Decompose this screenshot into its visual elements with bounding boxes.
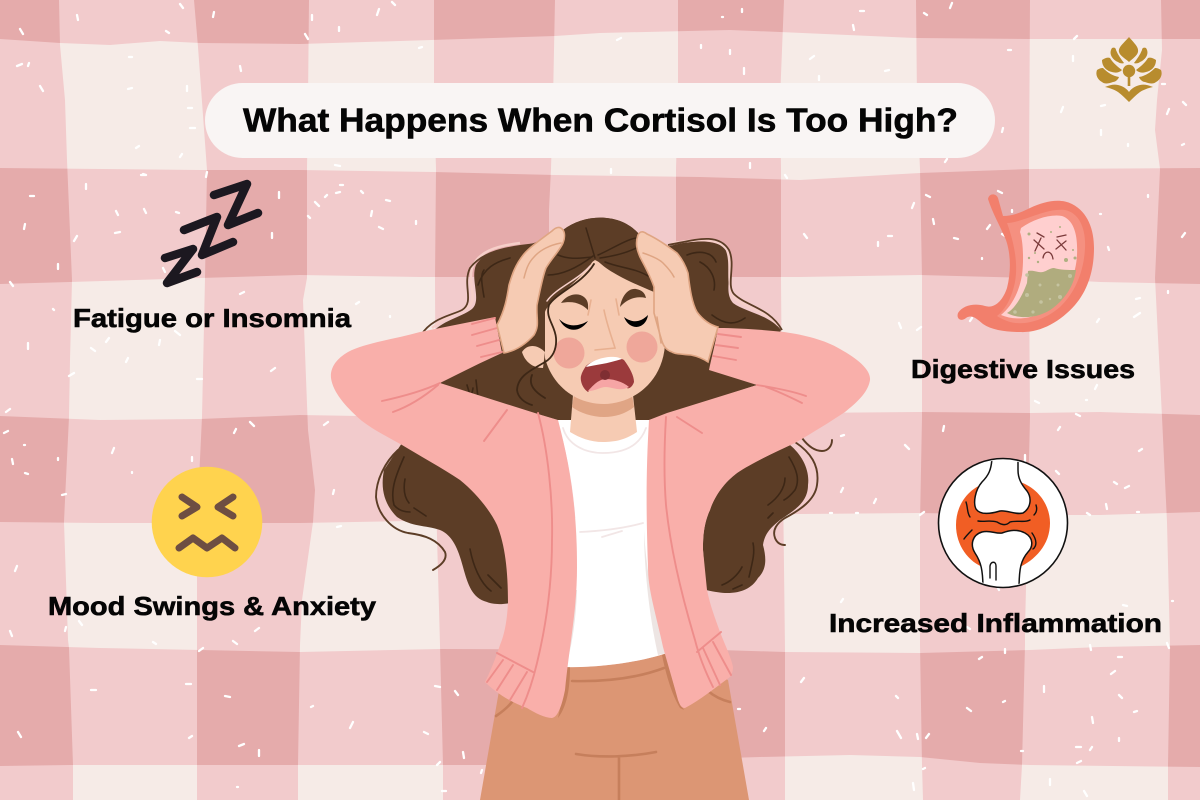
eyes bbox=[559, 315, 648, 330]
icon: stomach bbox=[958, 194, 1094, 332]
character: stressed woman bbox=[331, 218, 870, 800]
label: Digestive Issues: Digestive Issues bbox=[911, 354, 1135, 384]
hair: lower right bbox=[703, 438, 832, 593]
hair: fringe and loose strand bbox=[517, 218, 654, 405]
icon: inflamed joint bbox=[938, 450, 1068, 590]
trousers bbox=[480, 653, 749, 800]
ear bbox=[522, 346, 545, 368]
hair: lower left bbox=[376, 443, 510, 604]
white shirt bbox=[557, 420, 667, 667]
face bbox=[522, 260, 665, 404]
title pill bbox=[205, 83, 995, 158]
eyebrows bbox=[561, 289, 646, 310]
hair: upper back bbox=[421, 218, 782, 425]
neck bbox=[570, 395, 637, 442]
right hand bbox=[637, 232, 718, 362]
jacket: right sleeve and panel bbox=[647, 328, 870, 708]
label: Increased Inflammation: Increased Inflammation bbox=[829, 608, 1162, 638]
logo: gold lotus bbox=[1096, 37, 1162, 102]
title text: What Happens When Cortisol Is Too High? bbox=[243, 102, 958, 138]
left hand bbox=[497, 227, 564, 353]
icon: zzz sleep bbox=[165, 184, 258, 283]
jacket: left sleeve and panel bbox=[331, 317, 577, 718]
icon: distressed emoji bbox=[152, 467, 262, 577]
mouth bbox=[581, 358, 634, 392]
cheeks bbox=[554, 332, 658, 368]
label: Mood Swings & Anxiety: Mood Swings & Anxiety bbox=[48, 591, 377, 621]
nose bbox=[588, 299, 619, 350]
label: Fatigue or Insomnia: Fatigue or Insomnia bbox=[73, 303, 352, 333]
